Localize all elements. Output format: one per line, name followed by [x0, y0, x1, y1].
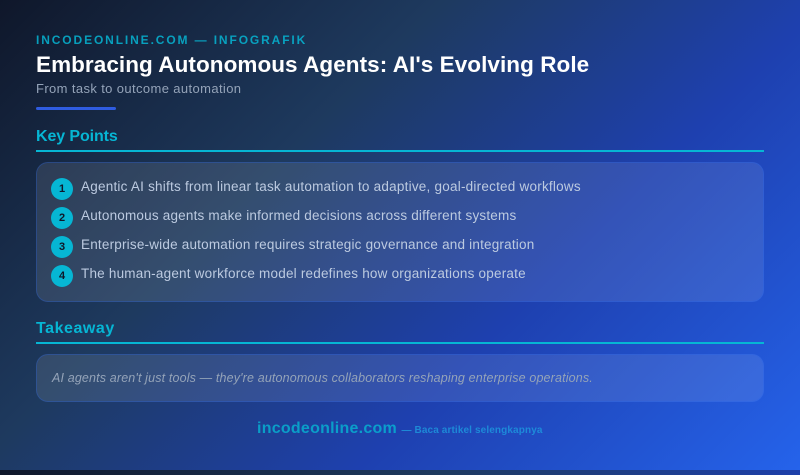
item 3 text: Enterprise-wide automation requires strategic governance and integration [81, 237, 534, 252]
footer: incodeonline.com — Baca artikel selengkapnya [257, 420, 543, 437]
item 2 badge [51, 207, 73, 229]
item 2 badge: 2 [59, 212, 65, 224]
item 1 text: Agentic AI shifts from linear task automation to adaptive, goal-directed workflows [81, 179, 581, 194]
item 4 badge: 4 [59, 270, 65, 282]
bottom strip [0, 470, 800, 475]
accent bar [36, 107, 116, 110]
heading: key points: Key Points [36, 128, 118, 145]
title: Embracing Autonomous Agents: AI's Evolving Role [36, 52, 589, 77]
heading: takeaway: Takeaway [36, 320, 115, 337]
item 2 text: Autonomous agents make informed decisions across different systems [81, 208, 516, 223]
takeaway text: AI agents aren't just tools — they're autonomous collaborators reshaping enterprise operations. [52, 371, 593, 385]
panel: key points [36, 162, 764, 302]
item 4 text: The human-agent workforce model redefines how organizations operate [81, 266, 526, 281]
panel: takeaway [36, 354, 764, 402]
subtitle: From task to outcome automation [36, 81, 241, 96]
item 1 badge: 1 [59, 183, 65, 195]
item 3 badge: 3 [59, 241, 65, 253]
item 4 badge [51, 265, 73, 287]
item 1 badge [51, 178, 73, 200]
item 3 badge [51, 236, 73, 258]
eyebrow label: INCODEONLINE.COM — INFOGRAFIK [36, 33, 307, 47]
